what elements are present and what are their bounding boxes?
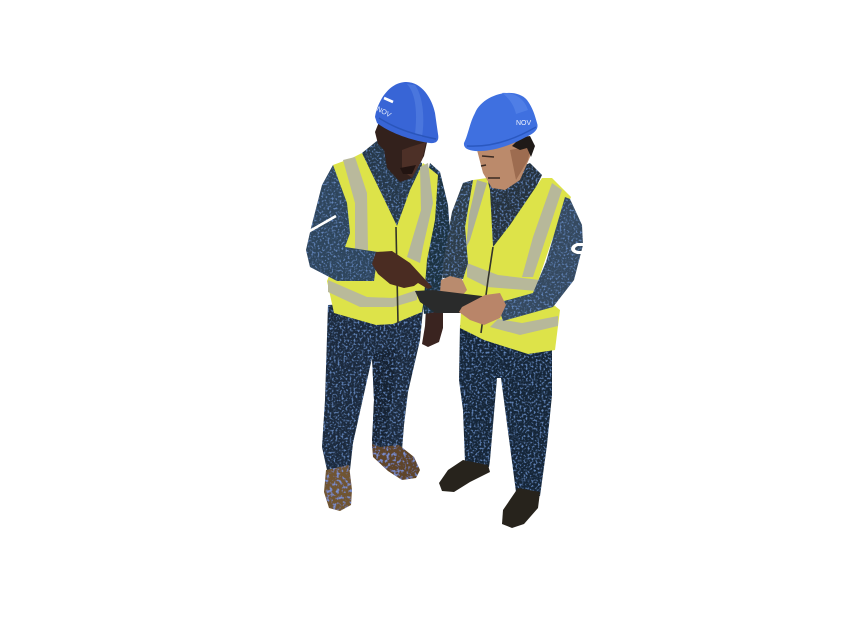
right worker jeans (459, 325, 552, 496)
left worker hanging hand (422, 308, 443, 347)
left worker head (375, 122, 428, 182)
right worker right hand (459, 293, 506, 325)
right worker sleeves (443, 180, 583, 321)
right worker head (477, 132, 535, 190)
right worker left hand (440, 276, 467, 296)
left worker jeans (322, 300, 424, 470)
right worker torso (488, 163, 542, 250)
white dash mark on sleeve (308, 216, 336, 232)
right worker blue hard hat (464, 93, 538, 151)
left worker blue hard hat (375, 82, 438, 143)
right worker blue hard hat: NOV (516, 120, 532, 127)
left worker torso and far sleeve (362, 140, 450, 314)
right worker black boots (439, 460, 540, 528)
left worker pointing hand (372, 251, 432, 289)
left worker boots (324, 444, 420, 511)
tablet (415, 290, 486, 313)
right worker high-visibility vest (460, 178, 571, 354)
white ring mark on sleeve (571, 243, 583, 254)
figure: left worker (306, 82, 450, 511)
left worker blue hard hat: NOV (375, 106, 392, 119)
left worker near sleeve (306, 165, 378, 281)
figure: right worker (415, 93, 583, 528)
left worker high-visibility vest (327, 153, 438, 325)
